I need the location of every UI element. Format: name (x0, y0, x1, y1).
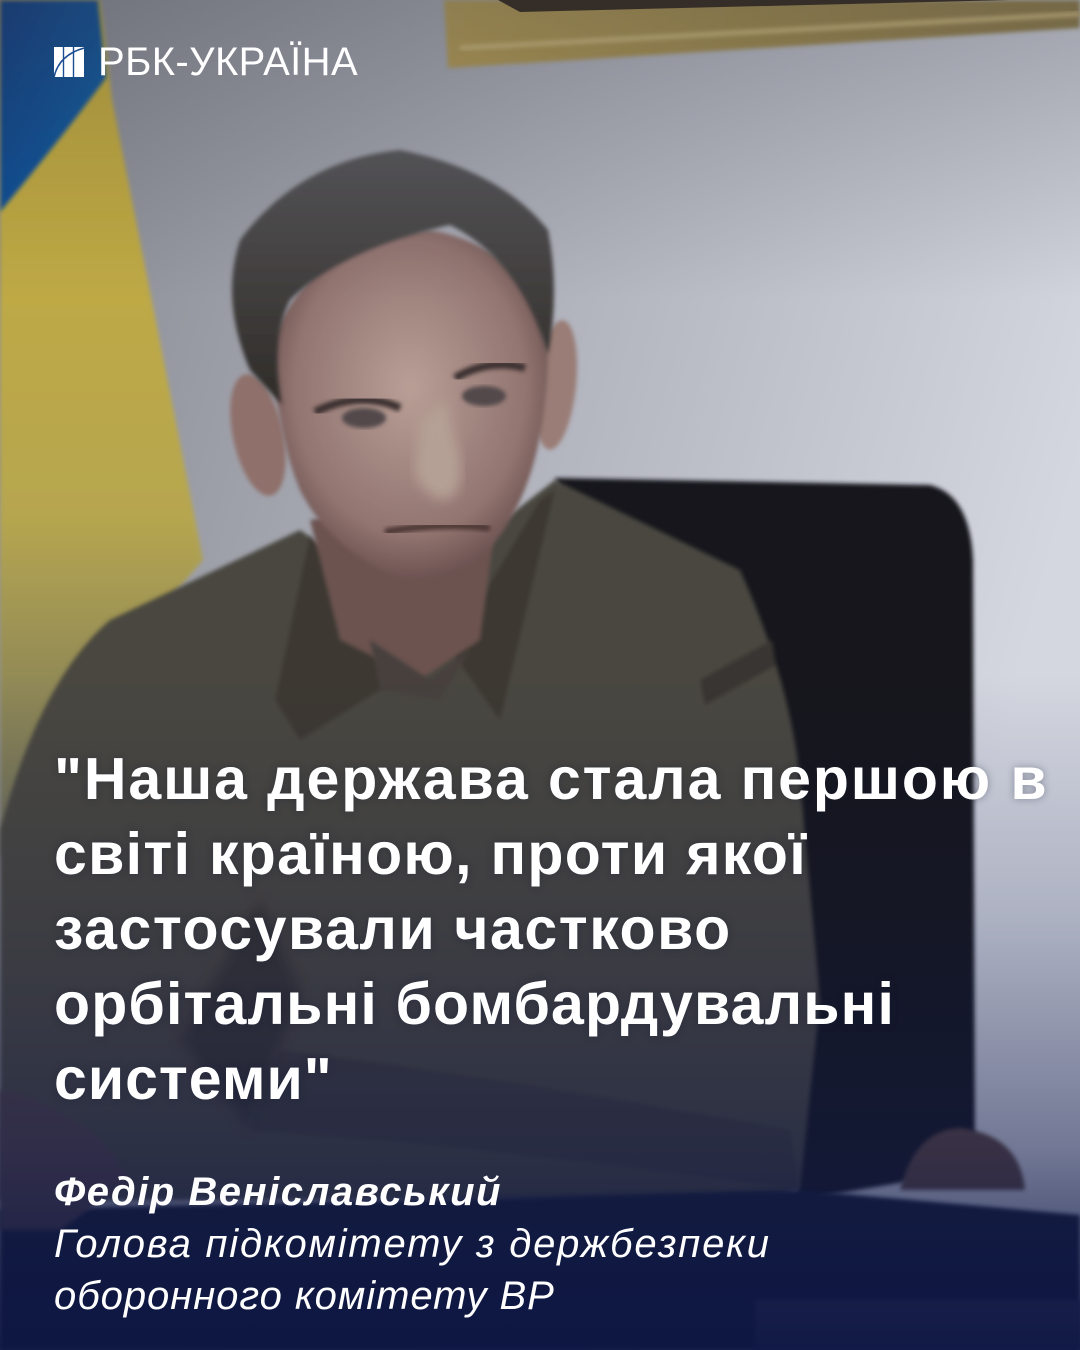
logo: RBC-Ukraine (54, 40, 358, 84)
frame (444, 0, 1080, 68)
body (0, 480, 820, 1200)
icon: logo mark (54, 47, 84, 77)
logo wordmark: РБК-УКРАЇНА (98, 40, 358, 84)
attribution (54, 1170, 771, 1318)
speaker name: Федір Веніславський (54, 1170, 502, 1214)
quote: орбітальні бомбардувальні (54, 971, 895, 1037)
quote: системи" (54, 1046, 333, 1112)
nose and mouth (415, 400, 461, 500)
quote (54, 746, 1049, 1112)
quote: застосували частково (54, 896, 732, 962)
dark gradients (0, 0, 1080, 300)
speaker committee: оборонного комітету ВР (54, 1274, 555, 1318)
eyes and brows (315, 400, 400, 412)
chair (555, 478, 975, 1200)
face (272, 230, 548, 580)
flag (0, 0, 203, 860)
hair (232, 150, 554, 405)
speaker role: Голова підкомітету з держбезпеки (54, 1222, 771, 1266)
quote: світі країною, проти якої (54, 821, 807, 887)
quote: "Наша держава стала першою в (54, 746, 1049, 812)
desk (0, 1190, 1080, 1350)
ears (221, 369, 295, 501)
neck (310, 490, 500, 680)
